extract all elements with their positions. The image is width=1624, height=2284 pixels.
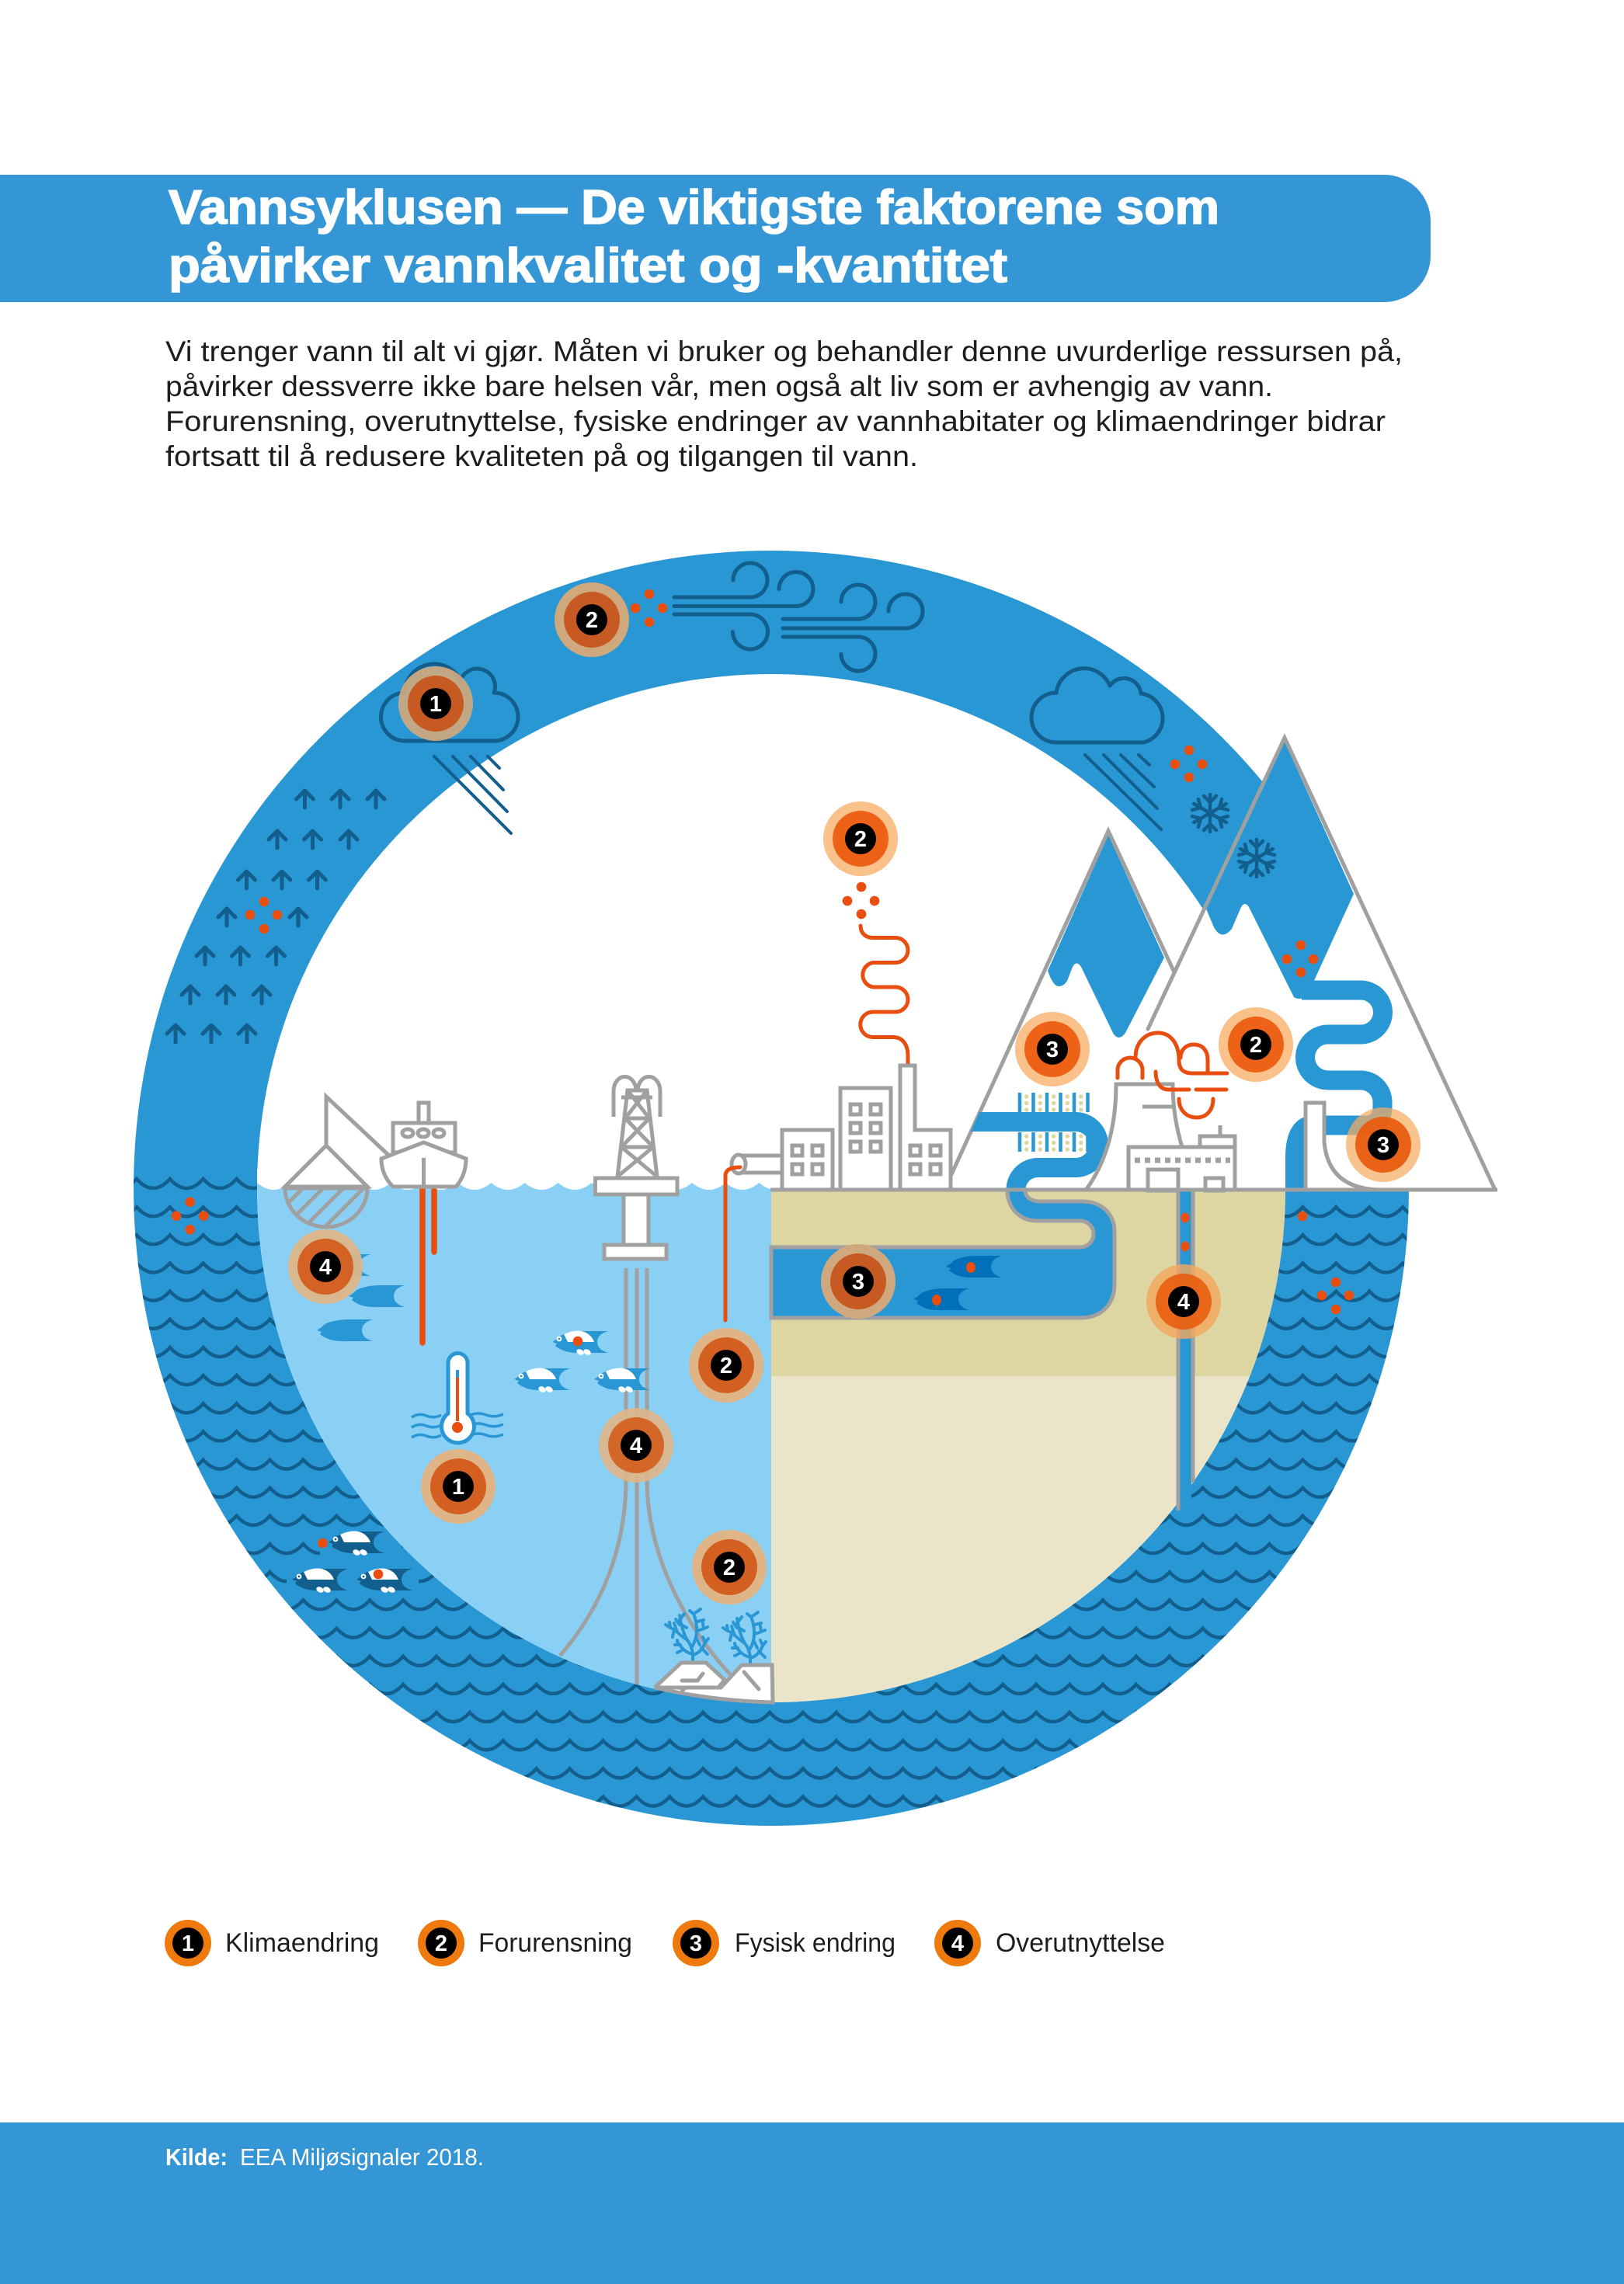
mountain left xyxy=(944,831,1174,1190)
pollutant dots: ring xyxy=(172,589,1354,1314)
marker 2 wind xyxy=(555,582,629,657)
marker 3 dam xyxy=(1346,1107,1421,1182)
factory smoke xyxy=(861,926,908,1065)
marker 4 pipelines xyxy=(599,1408,673,1483)
legend: Klimaendring: Klimaendring xyxy=(225,1928,379,1958)
icon: rain cloud left xyxy=(381,664,518,833)
marker 3 mountain river: 3 xyxy=(1046,1038,1059,1062)
marker 4 net xyxy=(288,1229,363,1304)
marker 2 wind: 2 xyxy=(586,608,598,633)
soil cross-section xyxy=(771,1190,1299,1702)
title: Vannsyklusen — De viktigste faktorene som xyxy=(169,181,1219,235)
marker 2 reef xyxy=(692,1530,767,1604)
cooling tower xyxy=(1087,1084,1183,1189)
discharge pipe xyxy=(725,1167,740,1320)
icon: evaporation arrows xyxy=(167,791,384,1042)
title: påvirker vannkvalitet og -kvantitet xyxy=(169,239,1007,293)
orange oil spills from ship xyxy=(423,1189,434,1343)
fish ladder xyxy=(1020,1093,1087,1152)
intro text: fortsatt til å redusere kvaliteten på og tilgangen til vann. xyxy=(165,440,918,472)
river fish xyxy=(913,1256,1002,1310)
marker 2 power plant: 2 xyxy=(1250,1033,1262,1058)
marker 4 net: 4 xyxy=(319,1255,332,1280)
legend: Klimaendring xyxy=(165,1920,379,1966)
ocean fish in ring xyxy=(292,1531,412,1594)
marker 1 temperature: 1 xyxy=(452,1475,464,1500)
icon: wind xyxy=(674,563,923,671)
underground river xyxy=(771,1190,1115,1318)
steam plume xyxy=(1118,1033,1227,1118)
icon: rain cloud right xyxy=(1031,669,1163,829)
icon: snowflake on mountain xyxy=(1237,840,1276,877)
sea cross-section xyxy=(257,1169,771,1702)
legend: Overutnyttelse xyxy=(934,1920,1165,1966)
marker 3 underground river xyxy=(821,1244,895,1319)
marker 2 discharge xyxy=(689,1328,763,1403)
marker 4 pipelines: 4 xyxy=(630,1434,642,1458)
marker 1 cloud: 1 xyxy=(429,692,442,717)
horizon line xyxy=(770,1188,1497,1191)
buildings and factory xyxy=(732,1066,951,1190)
dam xyxy=(1285,1103,1379,1194)
sea fish xyxy=(514,1331,650,1393)
inner circle: sky xyxy=(257,674,1285,1702)
pollutant dots: mountain xyxy=(1282,940,1318,977)
water cycle ring xyxy=(103,551,1436,1826)
marker 3 mountain river xyxy=(1015,1012,1090,1086)
legend: Overutnyttelse: Overutnyttelse xyxy=(996,1928,1165,1958)
seabed rocks xyxy=(655,1663,773,1702)
marker 1 temperature xyxy=(421,1449,496,1524)
legend: Forurensning: 2 xyxy=(435,1931,447,1956)
marker 2 discharge: 2 xyxy=(720,1354,732,1378)
ship xyxy=(381,1103,466,1187)
icon: snowflake on ring xyxy=(1191,794,1229,832)
marker 3 underground river: 3 xyxy=(852,1270,864,1295)
intro text: Forurensning, overutnyttelse, fysiske endringer av vannhabitater og klimaendringer bidrar xyxy=(165,405,1386,437)
marker 1 cloud xyxy=(398,666,473,741)
power plant xyxy=(1128,1125,1235,1191)
marker 2 factory air: 2 xyxy=(854,827,867,852)
legend: Forurensning: Forurensning xyxy=(478,1928,632,1958)
legend: Overutnyttelse: 4 xyxy=(951,1931,964,1956)
legend: Klimaendring: 1 xyxy=(182,1931,194,1956)
intro text: påvirker dessverre ikke bare helsen vår, men også alt liv som er avhengig av vann. xyxy=(165,370,1273,402)
legend xyxy=(165,1920,1165,1966)
intro text xyxy=(165,335,1403,472)
title banner xyxy=(0,175,1431,302)
oil platform xyxy=(595,1076,677,1259)
title xyxy=(169,181,1219,293)
legend: Fysisk endring: Fysisk endring xyxy=(735,1928,895,1958)
legend: Fysisk endring: 3 xyxy=(690,1931,702,1956)
source note: EEA Miljøsignaler 2018. xyxy=(240,2143,484,2171)
marker 4 well: 4 xyxy=(1177,1290,1190,1315)
footer band xyxy=(0,2122,1624,2284)
intro text: Vi trenger vann til alt vi gjør. Måten vi bruker og behandler denne uvurderlige ressursen på, xyxy=(165,335,1403,367)
legend: Fysisk endring xyxy=(673,1920,895,1966)
seabed pipelines xyxy=(560,1268,730,1684)
marker 2 reef: 2 xyxy=(723,1556,735,1580)
muted fish (sea) xyxy=(315,1254,405,1341)
marker 2 factory air xyxy=(823,801,898,876)
river through left mountain xyxy=(971,1112,1098,1196)
groundwater well xyxy=(1178,1190,1193,1514)
marker 3 dam: 3 xyxy=(1377,1133,1389,1158)
marker 2 power plant xyxy=(1219,1007,1293,1082)
mountain right xyxy=(1148,738,1495,1190)
coral xyxy=(666,1609,766,1663)
trawler net xyxy=(264,1097,389,1227)
legend: Forurensning xyxy=(418,1920,632,1966)
source note: Kilde: xyxy=(165,2143,228,2171)
thermometer xyxy=(412,1353,503,1443)
river through right mountain xyxy=(1302,990,1382,1125)
smoke particles xyxy=(843,882,879,919)
marker 4 well xyxy=(1146,1264,1221,1339)
